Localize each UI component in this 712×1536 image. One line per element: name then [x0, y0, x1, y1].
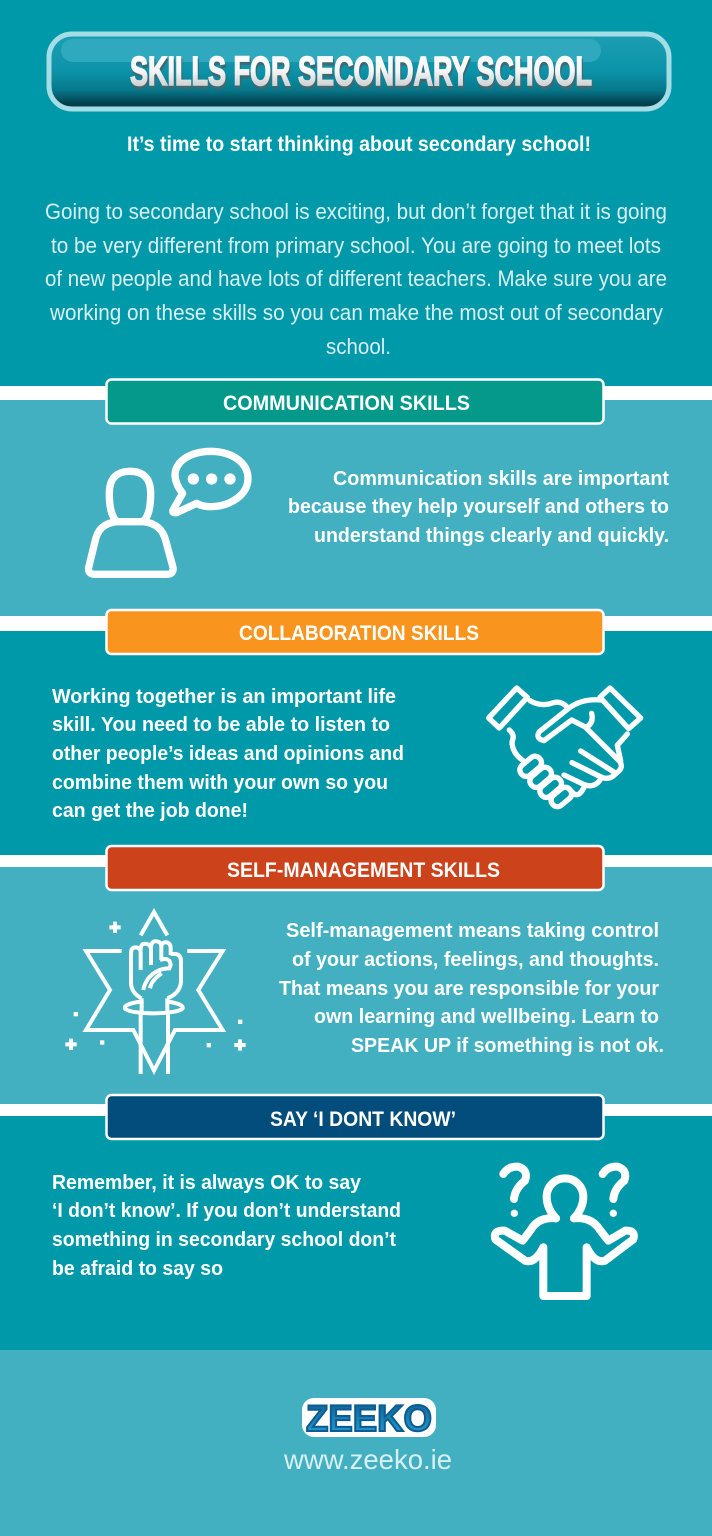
panel: self-management background — [0, 855, 712, 1116]
self-management text: That means you are responsible for your — [279, 977, 659, 1000]
intro paragraph: of new people and have lots of different teachers. Make sure you are — [45, 266, 667, 291]
self-management text: Self-management means taking control — [286, 919, 659, 942]
collaboration text: combine them with your own so you — [52, 771, 388, 794]
section header: self-management skills — [106, 846, 604, 890]
panel: collaboration background — [0, 616, 712, 867]
collaboration text: can get the job done! — [52, 799, 248, 822]
intro paragraph — [45, 199, 667, 359]
footer website url: www.zeeko.ie — [283, 1444, 452, 1475]
section header: say I dont know: SAY ‘I DONT KNOW’ — [270, 1107, 456, 1131]
panel: say I dont know background — [0, 1104, 712, 1350]
communication text: because they help yourself and others to — [288, 495, 669, 518]
collaboration text: other people’s ideas and opinions and — [52, 742, 404, 765]
self-management text: of your actions, feelings, and thoughts. — [292, 948, 659, 971]
communication text: understand things clearly and quickly. — [314, 524, 669, 547]
section header: collaboration skills — [106, 610, 604, 654]
section header: communication skills: COMMUNICATION SKILLS — [223, 391, 470, 415]
intro paragraph: working on these skills so you can make the most out of secondary — [49, 300, 663, 325]
intro paragraph: school. — [326, 334, 391, 359]
section header: collaboration skills: COLLABORATION SKILLS — [239, 621, 479, 645]
self-management text — [279, 919, 664, 1057]
icon: handshake — [489, 688, 641, 809]
section header: self-management skills: SELF-MANAGEMENT SKILLS — [227, 858, 500, 882]
footer logo: ZEEKO — [306, 1398, 432, 1439]
icon: person shrugging with question marks — [495, 1167, 634, 1296]
self-management text: SPEAK UP if something is not ok. — [351, 1034, 664, 1057]
say I dont know text — [52, 1171, 401, 1280]
intro paragraph: to be very different from primary school. You are going to meet lots — [51, 233, 661, 258]
collaboration text — [52, 685, 404, 822]
say I dont know text: something in secondary school don’t — [52, 1228, 396, 1251]
title banner — [49, 34, 669, 109]
panel: communication background — [0, 386, 712, 631]
say I dont know text: ‘I don’t know’. If you don’t understand — [52, 1199, 401, 1222]
section header: communication skills — [106, 380, 604, 424]
say I dont know text: be afraid to say so — [52, 1257, 223, 1280]
panel: footer background — [0, 1350, 712, 1536]
intro paragraph: Going to secondary school is exciting, but don’t forget that it is going — [45, 199, 667, 224]
self-management text: own learning and wellbeing. Learn to — [314, 1005, 659, 1028]
say I dont know text: Remember, it is always OK to say — [52, 1171, 362, 1194]
communication text: Communication skills are important — [333, 467, 669, 490]
communication text — [288, 467, 669, 547]
icon: raised fist in star — [65, 912, 246, 1074]
collaboration text: Working together is an important life — [52, 685, 396, 708]
background: intro panel — [0, 0, 712, 386]
section header: say I dont know — [106, 1095, 604, 1139]
icon: person with speech bubble — [89, 451, 248, 574]
intro heading: It’s time to start thinking about secondary school! — [127, 133, 591, 156]
collaboration text: skill. You need to be able to listen to — [52, 713, 390, 736]
